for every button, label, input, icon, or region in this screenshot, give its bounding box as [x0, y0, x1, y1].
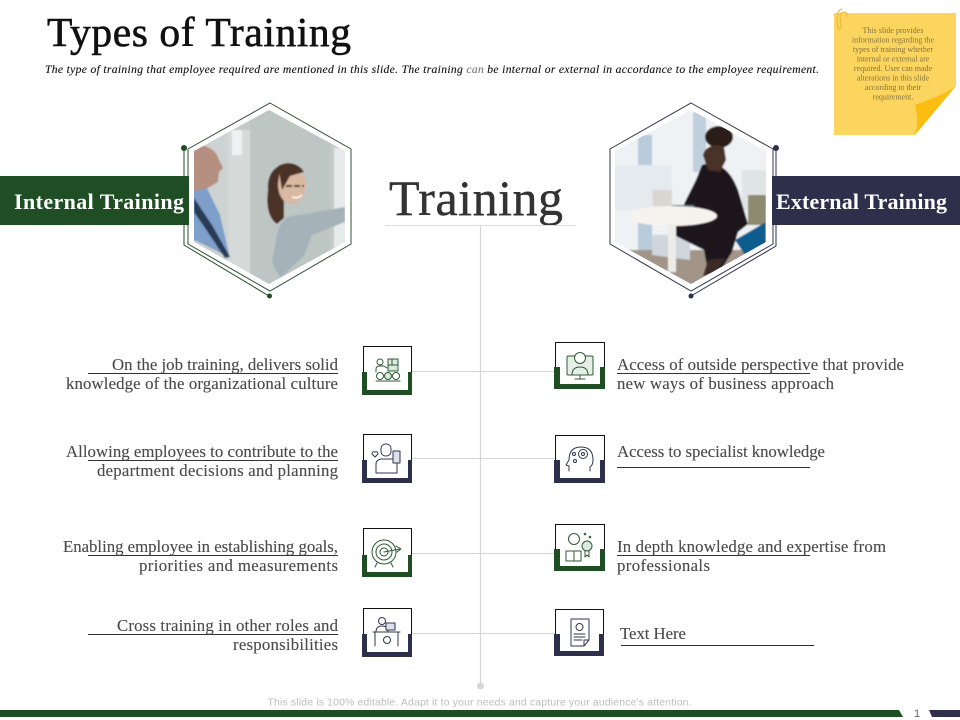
icon: target — [362, 528, 412, 577]
item right 2: Access to specialist knowledge — [617, 442, 825, 461]
subtitle: The type of training that employee required are mentioned in this slide. The training can be internal or external in accordance to the employee requirement. — [45, 63, 819, 76]
center heading: Training: Training — [389, 170, 563, 226]
sticky note: requirement. — [873, 92, 913, 102]
sticky note: information regarding the — [852, 36, 935, 44]
item right 4: Text Here — [620, 624, 686, 643]
icon: online mentor — [554, 342, 605, 389]
item right 3: professionals — [617, 556, 710, 575]
item right 1: new ways of business approach — [617, 374, 835, 393]
external training hexagon photo — [610, 103, 779, 298]
sticky note: types of training whether — [853, 45, 933, 54]
item left 2 — [66, 442, 339, 480]
item left 3: priorities and measurements — [139, 556, 338, 575]
horizontal connectors — [412, 372, 555, 634]
item right 3 — [617, 537, 886, 575]
banner: external training — [772, 176, 960, 225]
sticky note: alterations in this slide — [857, 74, 930, 82]
footer note: This slide is 100% editable. Adapt it to your needs and capture your audience's attention. — [268, 698, 692, 708]
sticky note: This slide provides — [863, 26, 923, 35]
icon: contributor — [362, 434, 412, 483]
item left 1: On the job training, delivers solid — [112, 355, 339, 374]
banner: internal training: Internal Training — [14, 189, 184, 214]
central vertical connector — [477, 226, 484, 690]
item left 1: knowledge of the organizational culture — [66, 374, 338, 393]
footer bar — [0, 710, 960, 717]
sticky note: required. User can made — [854, 64, 933, 73]
sticky note: according to their — [865, 83, 922, 92]
item right 1: Access of outside perspective that provide — [617, 355, 904, 374]
item left 3: Enabling employee in establishing goals, — [63, 537, 338, 556]
item left 2: Allowing employees to contribute to the — [66, 442, 338, 461]
icon: desk worker — [362, 608, 412, 657]
item left 4 — [88, 616, 339, 654]
icon: document — [554, 610, 604, 656]
icon: expert with badge — [554, 524, 605, 571]
title: Types of Training — [47, 9, 351, 55]
item right 3: In depth knowledge and expertise from — [617, 537, 886, 556]
icon: head with gear — [554, 436, 605, 483]
icon: team meeting — [362, 346, 412, 395]
item left 1 — [66, 355, 339, 393]
internal training hexagon photo — [181, 103, 351, 298]
banner: external training: External Training — [776, 189, 947, 214]
item left 4: Cross training in other roles and — [117, 616, 339, 635]
banner: internal training — [0, 176, 189, 225]
sticky note — [834, 9, 956, 135]
item left 3 — [63, 537, 338, 575]
sticky note: internal or external are — [857, 54, 930, 64]
item left 4: responsibilities — [233, 635, 338, 654]
item right 1 — [617, 355, 904, 393]
page number: 1 — [914, 708, 920, 720]
item left 2: department decisions and planning — [97, 461, 339, 480]
